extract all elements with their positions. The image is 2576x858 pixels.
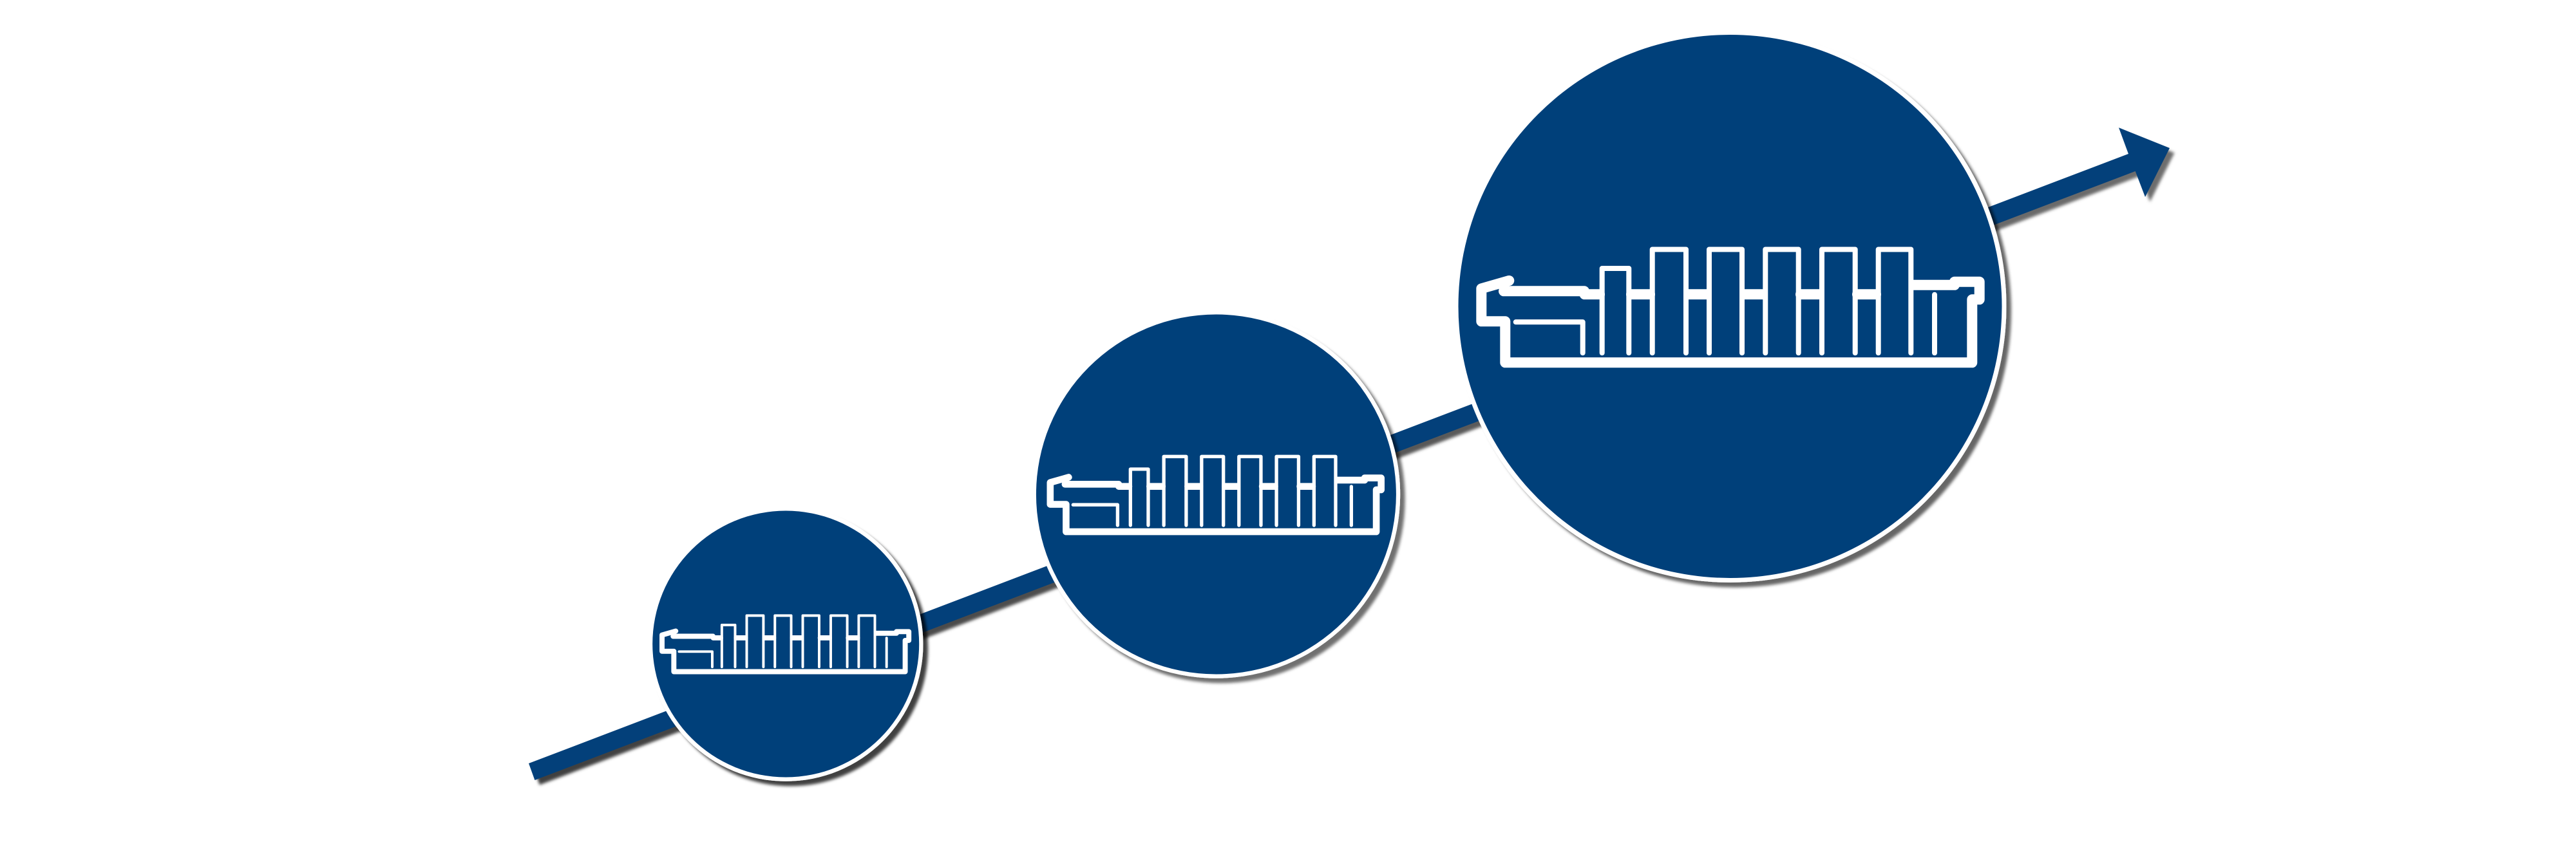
circle: medium badge (1032, 310, 1400, 678)
arrow: rising growth arrow (529, 127, 2174, 785)
panel: large circle with large ship (1454, 30, 2007, 583)
icon: large ship (1481, 250, 1980, 362)
icon: small ship (662, 615, 909, 672)
panel: medium circle with medium ship (1032, 310, 1400, 678)
circle: small badge (649, 507, 923, 781)
panel: small circle with small ship (649, 507, 923, 781)
icon: medium ship (1050, 456, 1381, 532)
circle: large badge (1454, 30, 2007, 583)
